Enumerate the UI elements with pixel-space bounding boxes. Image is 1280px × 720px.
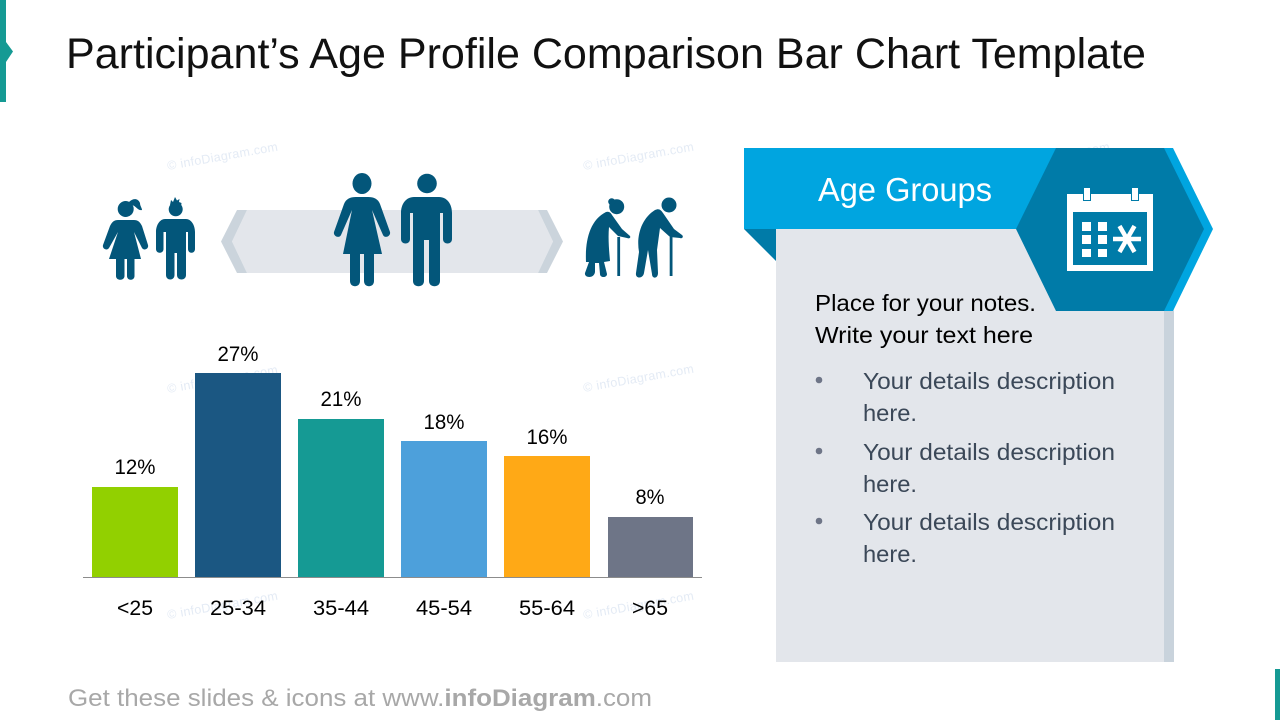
icon: woman and man — [334, 173, 452, 286]
watermarks: © infoDiagram.com — [998, 140, 1111, 173]
watermarks: © infoDiagram.com — [166, 589, 279, 622]
bottom-right accent — [1275, 669, 1280, 720]
bar: over 65: 8% — [636, 486, 664, 509]
bar: 45-54: 18% — [424, 411, 464, 434]
left accent marker — [0, 0, 13, 102]
bullet list: here. — [863, 471, 917, 497]
icon: girl and boy — [103, 197, 195, 280]
icon: calendar — [1067, 188, 1153, 271]
watermarks — [166, 140, 1111, 622]
panel body — [776, 229, 1174, 662]
watermarks: © infoDiagram.com — [166, 140, 279, 173]
bar: over 65 — [608, 486, 693, 620]
bar: under 25: 12% — [114, 456, 156, 479]
watermarks: © infoDiagram.com — [166, 363, 279, 396]
bar: 55-64 — [504, 426, 590, 620]
notes heading: Place for your notes. — [815, 290, 1036, 316]
bullet list: Your details description — [863, 368, 1115, 394]
bar: 25-34: 25-34 — [210, 597, 266, 620]
icon hexagon — [1016, 148, 1204, 311]
bullet list: Your details description — [863, 439, 1115, 465]
bar: 35-44: 35-44 — [313, 597, 369, 620]
bullet list: Your details description — [863, 509, 1115, 535]
notes heading: Write your text here — [815, 322, 1033, 348]
bar: under 25: <25 — [117, 597, 153, 620]
bar: over 65: >65 — [632, 597, 668, 620]
bullet list: here. — [863, 400, 917, 426]
bar: 55-64: 16% — [526, 426, 568, 449]
footer credit: Get these slides & icons at www. infoDiagram .com — [68, 685, 652, 712]
panel heading: Age Groups — [818, 171, 992, 208]
bar: 45-54: 45-54 — [416, 597, 472, 620]
title: Participant’s Age Profile Comparison Bar Chart Template — [66, 30, 1146, 78]
watermarks: © infoDiagram.com — [582, 140, 695, 173]
bullet list — [816, 368, 1115, 567]
age range arrow band — [221, 210, 563, 273]
bar: 55-64: 55-64 — [519, 597, 575, 620]
watermarks: © infoDiagram.com — [582, 362, 695, 395]
bar: under 25 — [92, 456, 178, 620]
bar chart — [83, 343, 702, 620]
bullet list: here. — [863, 541, 917, 567]
bar: 35-44: 21% — [320, 388, 362, 411]
bar: 45-54 — [401, 411, 487, 620]
bar: 35-44 — [298, 388, 384, 620]
panel: age groups — [744, 148, 1213, 662]
bar: 25-34: 27% — [218, 343, 258, 366]
icon: elderly couple with canes — [585, 198, 683, 278]
notes heading — [815, 290, 1036, 348]
header ribbon — [744, 148, 1213, 311]
watermarks: © infoDiagram.com — [582, 589, 695, 622]
bar: 25-34 — [195, 343, 281, 620]
